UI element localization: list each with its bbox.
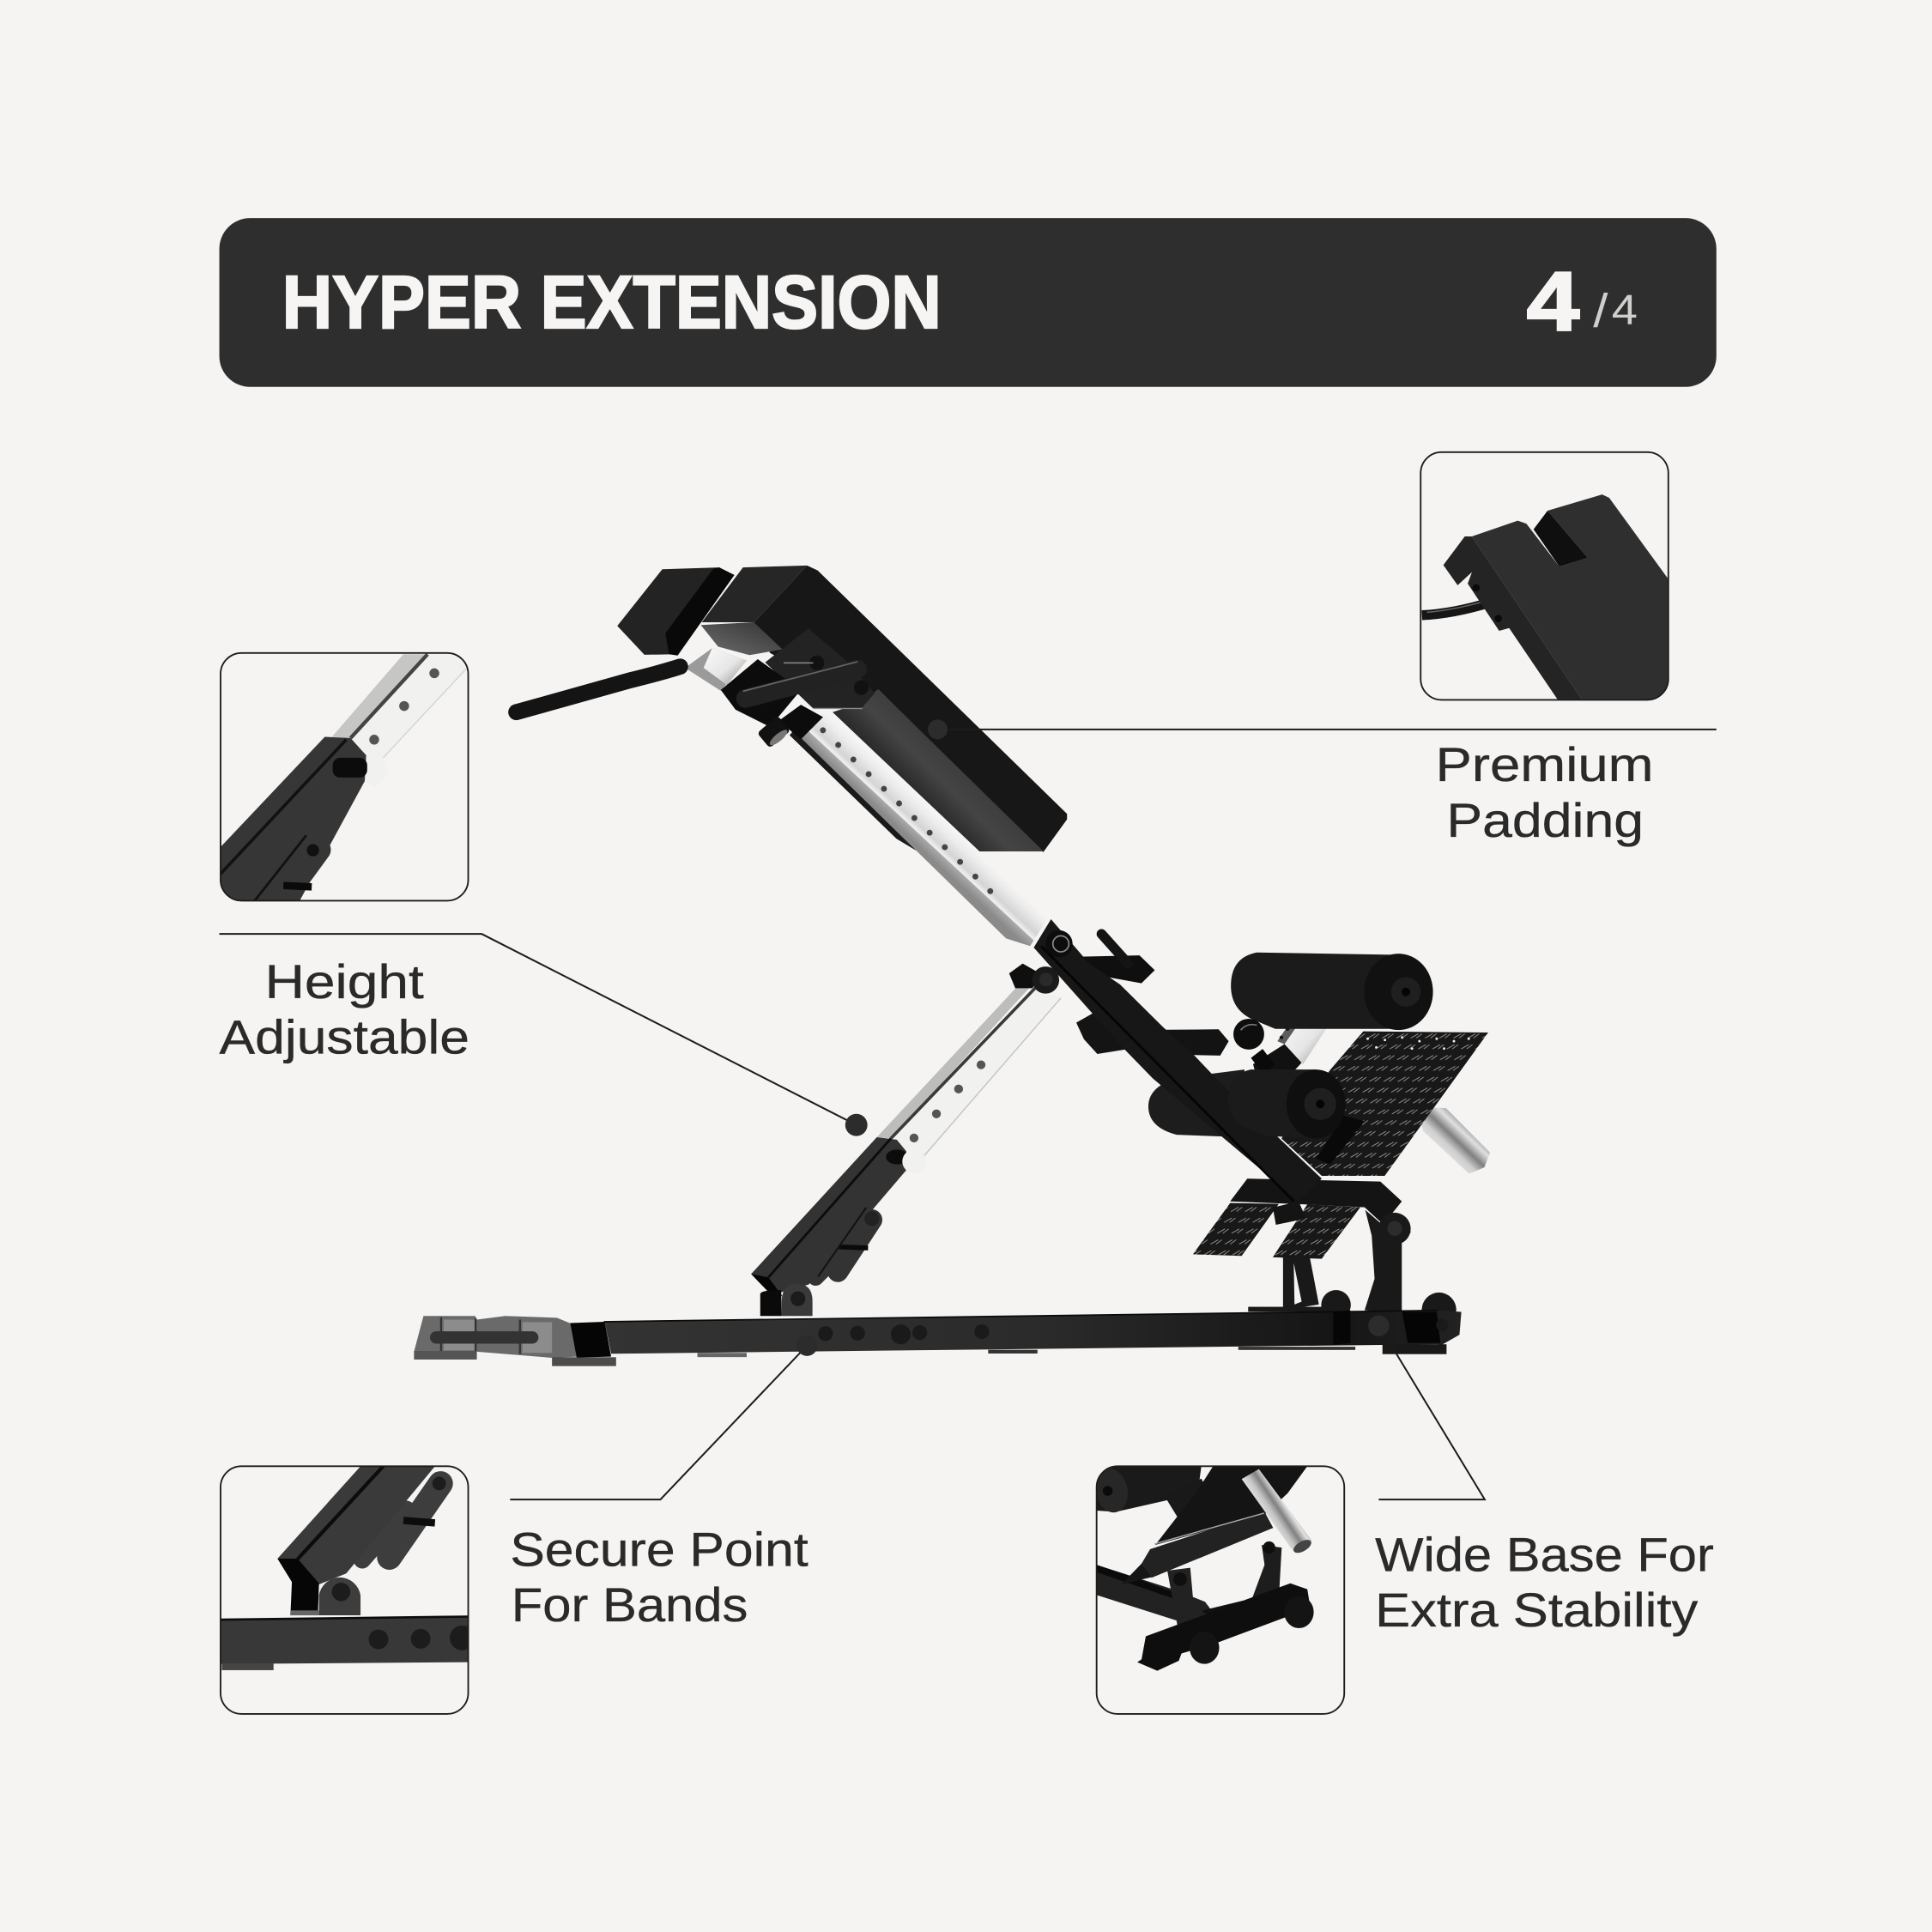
upper roller bracket bbox=[1277, 1010, 1330, 1064]
steel cap bbox=[685, 648, 747, 691]
base beam bbox=[414, 1311, 1462, 1366]
far roller bbox=[1148, 1069, 1245, 1137]
main padding bbox=[617, 566, 1067, 852]
marker dot bbox=[928, 719, 948, 739]
label: For Bands bbox=[512, 1578, 748, 1632]
pad lower body bbox=[790, 715, 948, 852]
pad end face bbox=[702, 566, 807, 622]
marker dot bbox=[796, 1335, 818, 1356]
right support leg and wheels bbox=[1248, 1210, 1457, 1327]
bracket plate bbox=[721, 628, 875, 727]
callout: wide base bbox=[1091, 1315, 1714, 1714]
steel post bbox=[1417, 1106, 1490, 1174]
top arm and peg bbox=[1063, 955, 1154, 984]
pin knob bbox=[757, 705, 823, 749]
thumbnail: padding bbox=[1420, 452, 1669, 700]
label: Extra Stability bbox=[1375, 1584, 1699, 1637]
step counter: 4 bbox=[1612, 288, 1638, 334]
label: Wide Base For bbox=[1375, 1528, 1714, 1581]
label: Premium bbox=[1435, 738, 1654, 791]
marker dot bbox=[1368, 1315, 1390, 1336]
small pad bbox=[617, 567, 735, 655]
tube knob and mount bbox=[1233, 1019, 1302, 1084]
label: Padding bbox=[1446, 794, 1644, 847]
label bbox=[510, 1523, 809, 1632]
lower adjustable sleeve bbox=[751, 1137, 926, 1316]
front roller bbox=[1228, 1069, 1346, 1138]
pivot joint knob bbox=[1009, 930, 1073, 994]
label: Height bbox=[265, 955, 424, 1008]
lower roller bracket arm bbox=[1153, 1029, 1229, 1056]
right foot plate bbox=[1273, 1204, 1360, 1259]
callout: secure point for bands bbox=[221, 1335, 818, 1714]
hyper extension machine bbox=[414, 566, 1490, 1366]
left foot plate bbox=[1193, 1203, 1279, 1256]
thumbnail: wide base bbox=[1091, 1465, 1344, 1714]
left support leg bbox=[1283, 1251, 1319, 1311]
cross arm bbox=[1230, 1178, 1402, 1225]
leader line bbox=[937, 729, 1717, 730]
label bbox=[1375, 1528, 1714, 1637]
label bbox=[220, 955, 469, 1063]
step counter: 4 bbox=[1527, 255, 1579, 348]
label: Adjustable bbox=[220, 1010, 469, 1063]
leader line bbox=[510, 1346, 807, 1499]
foot plate bbox=[1281, 1032, 1488, 1176]
marker dot bbox=[845, 1114, 868, 1136]
pad underside bbox=[833, 689, 1044, 851]
title: HYPER EXTENSION bbox=[282, 260, 942, 344]
leader line bbox=[220, 934, 857, 1125]
callout: height adjustable bbox=[220, 653, 868, 1136]
callout: premium padding bbox=[928, 452, 1717, 847]
label: Secure Point bbox=[510, 1523, 809, 1577]
clamp bbox=[1076, 1013, 1128, 1054]
leader line bbox=[1378, 1343, 1485, 1499]
label bbox=[1435, 738, 1654, 847]
left lower steel strip bbox=[877, 982, 1061, 1174]
upper roller bbox=[1231, 953, 1433, 1030]
main spine bbox=[1033, 919, 1322, 1202]
thumbnail: height bbox=[220, 653, 469, 902]
upper steel tube bbox=[792, 712, 1047, 946]
step counter bbox=[1527, 255, 1638, 348]
header bar bbox=[220, 218, 1717, 387]
step counter: / bbox=[1593, 284, 1608, 336]
thumbnail: secure point bbox=[221, 1466, 475, 1714]
right handle bbox=[743, 662, 857, 699]
large pad back bbox=[754, 566, 1067, 852]
left handle bbox=[517, 667, 680, 712]
